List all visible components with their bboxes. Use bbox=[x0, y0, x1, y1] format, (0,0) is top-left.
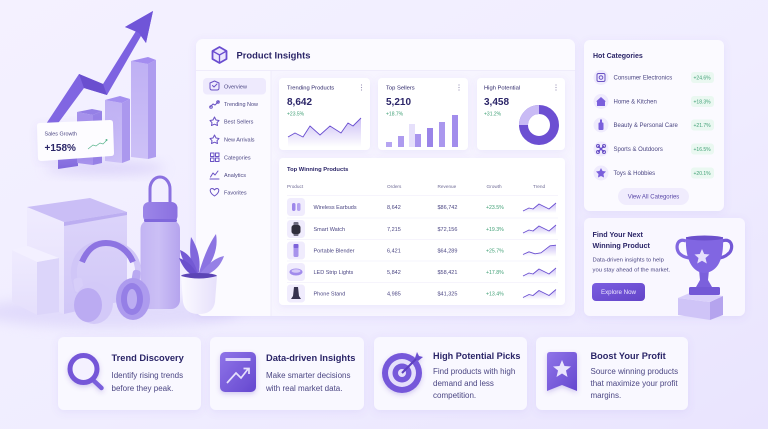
feature card: data-driven insights: Make smarter decisions bbox=[266, 371, 350, 380]
row: sports and outdoors: +16.5% bbox=[694, 147, 711, 153]
nav: best sellers: Best Sellers bbox=[224, 120, 254, 126]
small box bbox=[12, 246, 59, 315]
large box bbox=[27, 198, 127, 314]
panel: hot categories bbox=[584, 40, 724, 211]
feature card: trend discovery: Trend Discovery bbox=[112, 353, 185, 363]
illustration: product still life bbox=[12, 177, 224, 324]
card: top sellers bbox=[378, 78, 468, 150]
panel: hot categories: Hot Categories bbox=[593, 53, 643, 60]
rising arrow bbox=[46, 11, 153, 126]
text block: Data-driven insights to help bbox=[592, 258, 665, 264]
feature card: data-driven insights: Data-driven Insights bbox=[266, 353, 355, 363]
row: portable blender: 6,421 bbox=[387, 248, 401, 254]
feature card: boost your profit: Source winning products bbox=[590, 367, 678, 376]
row: consumer electronics: Consumer Electronics bbox=[614, 76, 672, 82]
row: wireless earbuds: 8,642 bbox=[387, 205, 401, 211]
row: led strip lights: 5,842 bbox=[387, 270, 401, 276]
nav: analytics: Analytics bbox=[224, 173, 246, 179]
card: top sellers: +18.7% bbox=[386, 112, 404, 118]
bar chart bbox=[386, 115, 458, 147]
nav: categories: Categories bbox=[224, 156, 251, 162]
row: led strip lights: LED Strip Lights bbox=[314, 270, 353, 276]
button: explore now bbox=[592, 283, 645, 301]
row: beauty and personal care bbox=[594, 118, 714, 132]
card: trending products: 8,642 bbox=[287, 97, 312, 108]
icon: target with dart bbox=[382, 352, 423, 393]
text block: you stay ahead of the market. bbox=[592, 268, 670, 274]
feature card: boost your profit: that maximize your profit bbox=[590, 379, 678, 388]
row: beauty and personal care: Beauty & Personal Care bbox=[614, 123, 679, 129]
feature card: high potential picks: competition. bbox=[433, 391, 476, 400]
feature card: data-driven insights: with real market data. bbox=[265, 384, 342, 393]
row: toys and hobbies: +20.1% bbox=[694, 171, 711, 177]
row: smart watch: $72,156 bbox=[438, 227, 457, 233]
card: high potential bbox=[477, 78, 565, 150]
button: view all categories: View All Categories bbox=[628, 195, 679, 201]
row: wireless earbuds: $86,742 bbox=[438, 205, 457, 211]
feature card: data-driven insights bbox=[210, 337, 364, 410]
row: phone stand: $41,325 bbox=[438, 292, 457, 298]
row: smart watch: Smart Watch bbox=[314, 227, 345, 233]
table header: Trend bbox=[533, 184, 545, 189]
water bottle bbox=[140, 177, 180, 309]
icon: analytics tile bbox=[220, 352, 256, 392]
row: smart watch bbox=[287, 220, 556, 238]
row: phone stand: 4,985 bbox=[387, 292, 401, 298]
row: home and kitchen: Home & Kitchen bbox=[614, 100, 657, 106]
row: led strip lights bbox=[287, 263, 556, 281]
row: portable blender: +25.7% bbox=[486, 248, 504, 254]
row: consumer electronics bbox=[594, 70, 714, 85]
feature card: trend discovery bbox=[58, 337, 201, 410]
row: led strip lights: +17.8% bbox=[486, 270, 504, 276]
icon: product box logo bbox=[212, 47, 226, 63]
feature card: trend discovery: Identify rising trends bbox=[112, 371, 183, 380]
heading: Find Your Next bbox=[592, 230, 644, 239]
row: phone stand: +13.4% bbox=[486, 292, 504, 298]
nav: trending now: Trending Now bbox=[224, 102, 258, 108]
feature card: trend discovery: before they peak. bbox=[112, 384, 173, 393]
row: sports and outdoors bbox=[594, 142, 714, 156]
card: top sellers: Top Sellers bbox=[386, 86, 415, 92]
card: trending products: Trending Products bbox=[287, 86, 334, 92]
table header: Orders bbox=[387, 184, 402, 189]
row: home and kitchen bbox=[594, 94, 714, 109]
row: wireless earbuds: Wireless Earbuds bbox=[314, 205, 357, 211]
callout: sales growth: +158% bbox=[44, 143, 76, 154]
panel: find your next winning product bbox=[584, 218, 745, 320]
feature card: boost your profit: Boost Your Profit bbox=[590, 351, 666, 361]
feature card: high potential picks bbox=[374, 337, 527, 410]
icon: trophy bbox=[677, 236, 732, 320]
row: toys and hobbies bbox=[594, 166, 714, 180]
headphones bbox=[73, 243, 150, 324]
sidebar navigation bbox=[203, 78, 266, 196]
panel: product insights dashboard bbox=[196, 39, 575, 316]
table: top winning products bbox=[279, 158, 565, 305]
donut chart bbox=[524, 110, 554, 140]
row: smart watch: 7,215 bbox=[387, 227, 401, 233]
feature card: boost your profit: margins. bbox=[590, 391, 621, 400]
heading: product insights: Product Insights bbox=[236, 50, 310, 60]
row: phone stand: Phone Stand bbox=[314, 292, 345, 298]
row: phone stand bbox=[287, 284, 556, 302]
row: smart watch: +19.3% bbox=[486, 227, 504, 233]
icon: magnifying glass bbox=[70, 356, 102, 388]
heading: Winning Product bbox=[592, 241, 651, 250]
row: wireless earbuds bbox=[287, 198, 556, 216]
button: view all categories bbox=[618, 188, 689, 205]
row: toys and hobbies: Toys & Hobbies bbox=[614, 171, 655, 177]
potted plant bbox=[179, 234, 224, 314]
nav: overview: Overview bbox=[224, 84, 247, 90]
heading bbox=[592, 230, 651, 250]
row: sports and outdoors: Sports & Outdoors bbox=[614, 147, 663, 153]
card: top sellers: 5,210 bbox=[386, 97, 411, 108]
text block bbox=[592, 258, 670, 274]
row: home and kitchen: +18.3% bbox=[694, 100, 711, 106]
card: high potential: 3,458 bbox=[484, 97, 509, 108]
nav: favorites: Favorites bbox=[224, 190, 247, 196]
callout: sales growth: Sales Growth bbox=[44, 132, 77, 138]
feature card: high potential picks: Find products with high bbox=[433, 367, 515, 376]
row: portable blender bbox=[287, 242, 556, 260]
row: consumer electronics: +24.6% bbox=[694, 76, 711, 82]
card: trending products bbox=[279, 78, 370, 150]
row: portable blender: $64,289 bbox=[438, 248, 457, 254]
feature card: high potential picks: demand and less bbox=[433, 379, 494, 388]
feature card: high potential picks: High Potential Picks bbox=[433, 351, 520, 361]
illustration: growth chart with arrow bbox=[37, 11, 165, 174]
button: explore now: Explore Now bbox=[601, 289, 637, 296]
card: high potential: High Potential bbox=[484, 86, 520, 92]
nav: new arrivals: New Arrivals bbox=[224, 138, 255, 144]
line chart bbox=[288, 118, 361, 147]
card: trending products: +23.5% bbox=[287, 112, 305, 118]
icon: bookmark star bbox=[547, 352, 577, 391]
table header: Growth bbox=[486, 184, 502, 189]
row: portable blender: Portable Blender bbox=[314, 248, 355, 254]
row: beauty and personal care: +21.7% bbox=[694, 123, 711, 129]
feature card: boost your profit bbox=[536, 337, 688, 410]
callout: sales growth bbox=[37, 120, 114, 161]
table: top winning products: Top Winning Products bbox=[287, 167, 348, 173]
chart bars bbox=[58, 57, 156, 169]
table header: Revenue bbox=[438, 184, 457, 189]
table header: Product bbox=[287, 184, 304, 189]
card: high potential: +31.2% bbox=[484, 112, 502, 118]
row: wireless earbuds: +23.5% bbox=[486, 205, 504, 211]
table header bbox=[287, 184, 545, 189]
row: led strip lights: $58,421 bbox=[438, 270, 457, 276]
